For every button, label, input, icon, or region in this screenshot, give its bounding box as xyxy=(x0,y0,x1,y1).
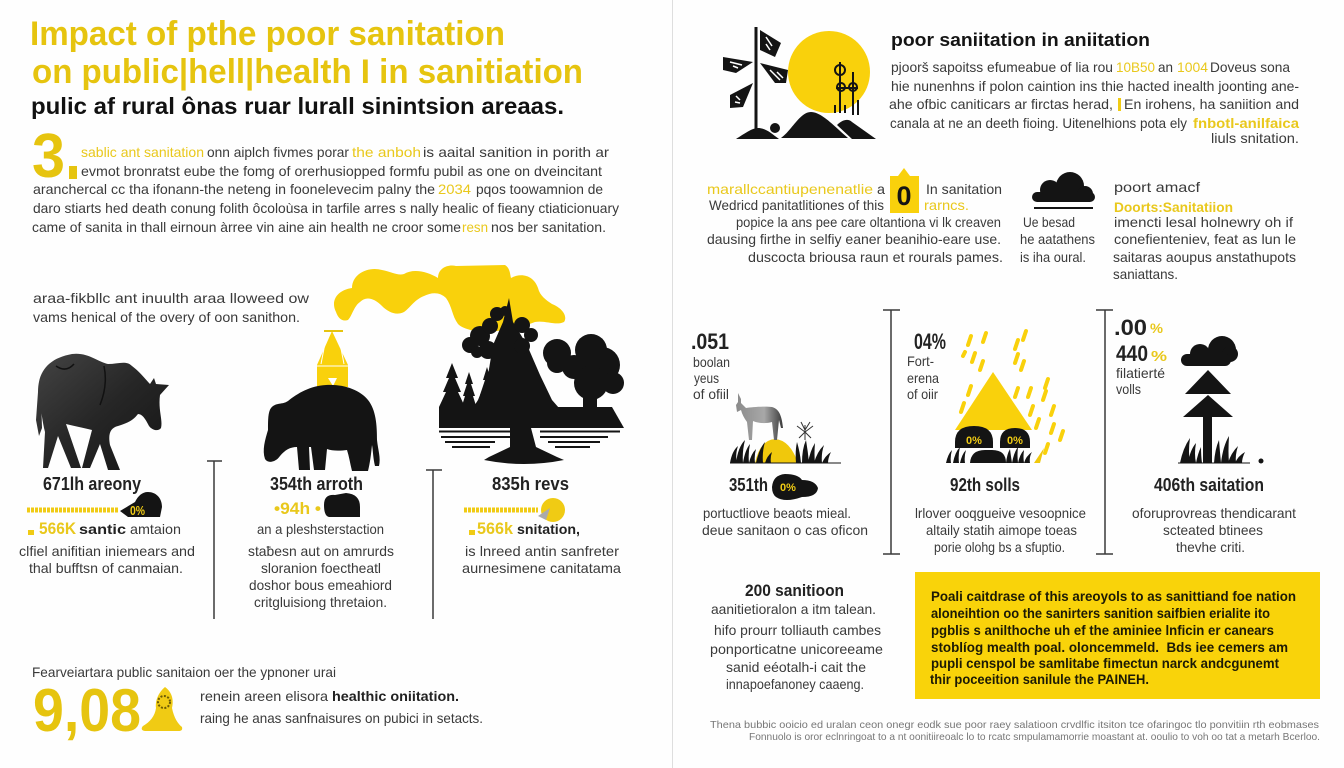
intro paragraph: onn aiplch fivmes porar xyxy=(207,144,349,160)
intro paragraph: sablic ant sanitation xyxy=(81,144,204,160)
middle text block xyxy=(707,181,1003,265)
bottom stat text: raing he anas sanfnaisures on pubici in setacts. xyxy=(200,710,483,726)
right heading: poor saniitation in aniitation xyxy=(891,30,1150,50)
stat: 92th: 92th solls xyxy=(950,475,1020,495)
column: livestock one: 0% xyxy=(130,503,145,518)
intro paragraph: is aaital sanition in porith ar xyxy=(423,144,609,160)
stat: 351th: 0% xyxy=(780,482,796,494)
title xyxy=(30,15,583,91)
column: forest: is lnreed antin sanfreter xyxy=(465,543,619,559)
bottom stat text: renein areen elisora xyxy=(200,688,328,704)
stat: 04%: 04% xyxy=(914,329,946,354)
right intro paragraph: hie nunenhns if polon caintion ins thie hacted inealth joonting ane- xyxy=(891,78,1299,94)
middle text block: duscocta briousa raun et rourals pames. xyxy=(748,249,1003,265)
stat: 440: .00 xyxy=(1114,315,1147,340)
right intro paragraph: canala at ne an deeth fioing. Uitenelhions pota ely xyxy=(890,115,1187,131)
intro paragraph: came of sanita in thall eirnoun àrree vin aine ain health ne croor some xyxy=(32,219,461,235)
right text block: saitaras aoupus anstathupots xyxy=(1113,249,1296,265)
intro paragraph: daro stiarts hed death conung folith ôcoloùsa in tarfile arres s nally healic of fieany ctiaticionuary xyxy=(33,200,619,216)
side note text: vams henical of the overy of oon sanithon. xyxy=(33,309,300,325)
stat: 406th: scteated btinees xyxy=(1163,522,1263,538)
title: Impact of pthe poor sanitation xyxy=(30,15,505,53)
stat: .051: yeus xyxy=(694,370,719,386)
stat: 440: % xyxy=(1150,320,1164,336)
cloud caption xyxy=(1020,214,1095,265)
stat: 440 xyxy=(1114,315,1167,397)
stat: 406th: oforuprovreas thendicarant xyxy=(1132,505,1296,521)
right intro paragraph: liuls snitation. xyxy=(1211,130,1299,146)
yellow cloud xyxy=(334,265,565,332)
divider lines left xyxy=(207,461,442,619)
icon: tree silhouette with water xyxy=(439,298,624,464)
column: livestock one: thal bufftsn of canmaian. xyxy=(29,560,183,576)
intro paragraph xyxy=(32,144,619,235)
right text block: poort amacf xyxy=(1114,179,1200,195)
right intro paragraph: ahe ofbic caniticars ar firctas herad, xyxy=(889,96,1113,112)
icon: yellow tower xyxy=(317,331,348,387)
column: livestock two: sloranion foectheatl xyxy=(261,560,381,576)
callout: yellow box: thir poceeition sanilule the PAINEH. xyxy=(930,671,1149,687)
right text block xyxy=(1113,179,1296,282)
right intro paragraph: fnbotl-anilfaica xyxy=(1193,115,1299,131)
callout: yellow box: aloneihtion oo the sanirters sanition saifbien erialite ito xyxy=(931,605,1270,621)
stat: 440: filatierté xyxy=(1116,365,1165,381)
intro paragraph: 2034 xyxy=(438,181,471,197)
intro paragraph: nos ber sanitation. xyxy=(491,219,606,235)
intro big number: 3 xyxy=(32,122,65,191)
stat: 04% xyxy=(907,329,946,402)
column: forest: 835h revs xyxy=(492,474,569,494)
middle text block: In sanitation xyxy=(926,181,1002,197)
column: livestock one: santic xyxy=(79,521,126,537)
intro paragraph: the anboh xyxy=(352,144,421,160)
side note text xyxy=(33,290,310,325)
callout: yellow box: pgblis s anilthoche uh ef the aminiee lnficin er canears xyxy=(931,622,1274,638)
column: livestock one: clfiel anifitian iniemears and xyxy=(19,543,195,559)
column: livestock two: critgluisiong thretaion. xyxy=(254,594,387,610)
icon: yellow cone xyxy=(142,687,182,731)
bottom stat text: healthic oniitation. xyxy=(332,688,459,704)
bottom left block: 200 sanitation: hifo prourr tolliauth cambes xyxy=(714,622,881,638)
bottom left block: 200 sanitation: innapoefanoney caaeng. xyxy=(726,676,864,692)
middle text block: Wedricd panitatlitiones of this xyxy=(709,197,884,213)
column: livestock one: 566K xyxy=(39,519,77,538)
icon: pine tree with cloud xyxy=(1178,336,1264,464)
icon: dark cloud xyxy=(1032,172,1095,209)
bottom big number: 9,08 xyxy=(33,677,141,744)
right intro paragraph: 1004 xyxy=(1177,59,1208,75)
stat: 351th: 351th xyxy=(729,475,768,495)
column: livestock two: an a pleshsterstaction xyxy=(257,521,384,537)
icon: yellow triangle with rain and domes: 0% xyxy=(1007,435,1023,447)
badge: zero: 0 xyxy=(896,181,912,211)
stat: 04%: of oiir xyxy=(907,386,938,402)
callout: yellow box: stoblíog mealth poal. oloncemmeld. Bds iee cemers am xyxy=(931,639,1288,655)
stat: 406th xyxy=(1132,475,1296,555)
footer note xyxy=(710,719,1320,743)
bottom stat caption: Fearveiartara public sanitaion oer the ypnoner urai xyxy=(32,664,336,680)
middle text block: popice la ans pee care oltantiona vi lk creaven xyxy=(736,214,1001,230)
icon: windmill with sun and hills xyxy=(723,27,876,139)
intro paragraph: evmot bronratst eube the fomg of orerhusiopped formfu pubil as one on dveincitant xyxy=(81,163,602,179)
stat: 406th: thevhe criti. xyxy=(1176,539,1245,555)
column: livestock one: amtaion xyxy=(130,521,181,537)
stat: 440: % xyxy=(1151,348,1167,365)
bottom left block: 200 sanitation: 200 sanitioon xyxy=(745,581,844,600)
footer note: Thena bubbic ooicio ed uralan ceon onegr eodk sue poor raey salatioon crvdlfic itsiton tce ofaringoc tlo ponvitiin rth eobmases xyxy=(710,719,1319,731)
middle text block: rarncs. xyxy=(924,197,969,213)
badge: zero xyxy=(890,168,919,213)
right text block: conefienteniev, feat as lun le xyxy=(1114,231,1296,247)
bottom left block: 200 sanitation: ponporticatne unicoreeame xyxy=(710,641,883,657)
subtitle: pulic af rural ônas ruar lurall sinintsion areaas. xyxy=(31,93,564,119)
column: livestock two: doshor bous emeahiord xyxy=(249,577,392,593)
intro paragraph: resn xyxy=(462,219,488,235)
stat: 351th: deue sanitaon o cas oficon xyxy=(702,522,868,538)
intro paragraph: pqos toowamnion de xyxy=(476,181,603,197)
column: livestock two: 354th arroth xyxy=(270,474,363,494)
middle text block: a xyxy=(877,181,885,197)
right text block: imencti lesal holnewry oh if xyxy=(1114,214,1293,230)
stat: 440: 440 xyxy=(1116,341,1148,366)
column: livestock one xyxy=(19,474,195,576)
icon: yellow triangle with rain and domes xyxy=(944,331,1063,463)
stat: 92th: lrlover ooqgueive vesoopnice xyxy=(915,505,1086,521)
right intro paragraph: an xyxy=(1158,59,1173,75)
title: on public|hell|health I in sanitiation xyxy=(32,53,583,91)
right intro paragraph: Doveus sona xyxy=(1210,59,1290,75)
footer note: Fonnuolo is oror eclnringoat to a nt oonitiireoalc lo to rcatc smpulamamorrie moastant at. ooulio to voh oo tat a metarh Bcerloo. xyxy=(749,731,1320,743)
icon: grazing animal xyxy=(264,385,380,471)
bottom left block: 200 sanitation: sanid eéotalh-i cait the xyxy=(726,659,866,675)
stat: 351th: portuctliove beaots mieal. xyxy=(703,505,851,521)
bottom left block: 200 sanitation: aanitietioralon a itm talean. xyxy=(711,601,876,617)
side note text: araa-fikbllc ant inuulth araa lloweed ow xyxy=(33,290,310,306)
intro paragraph: aranchercal cc tha ifonann-the neteng in foonelevecim palny the xyxy=(33,181,435,197)
column: livestock one: 671lh areony xyxy=(43,474,141,494)
right intro paragraph: pjoorš sapoitss efumeabue of lia rou xyxy=(891,59,1113,75)
stat: 04%: erena xyxy=(907,370,939,386)
stat: .051 xyxy=(691,329,730,402)
bottom left block: 200 sanitation xyxy=(710,581,883,692)
column: livestock two: •94h • xyxy=(274,499,321,518)
stat: .051: boolan xyxy=(693,354,730,370)
column: livestock two xyxy=(248,474,394,610)
middle text block: dausing firthe in selfiy eaner beanihio-eare use. xyxy=(707,231,1001,247)
right intro paragraph: En irohens, ha saniition and xyxy=(1124,96,1299,112)
right text block: saniattans. xyxy=(1113,266,1178,282)
icon: yellow triangle with rain and domes: 0% xyxy=(966,435,982,447)
icon: cow xyxy=(36,354,169,470)
callout: yellow box xyxy=(915,572,1320,699)
middle text block: marallccantiupenenatlie xyxy=(707,181,873,197)
stat: .051: of ofiil xyxy=(693,386,729,402)
bottom stat text xyxy=(200,688,483,726)
stat: 92th xyxy=(915,475,1086,555)
cloud caption: he aatathens xyxy=(1020,231,1095,247)
right intro paragraph xyxy=(889,59,1299,146)
column: forest: 566k xyxy=(477,519,514,538)
right intro paragraph: 10B50 xyxy=(1116,59,1155,75)
divider lines right xyxy=(883,310,1113,554)
column: forest: aurnesimene canitatama xyxy=(462,560,621,576)
icon: deer in grass xyxy=(730,393,841,463)
callout: yellow box: Poali caitdrase of this areoyols to as sanittiand foe nation xyxy=(931,588,1296,604)
column: forest: snitation, xyxy=(517,521,580,537)
stat: 351th xyxy=(702,474,868,538)
stat: 92th: altaily statih aimope toeas xyxy=(926,522,1077,538)
stat: 04%: Fort- xyxy=(907,353,934,369)
stat: 406th: 406th saitation xyxy=(1154,475,1264,495)
stat: 92th: porie olohg bs a sfuptio. xyxy=(934,539,1065,555)
stat: 440: volls xyxy=(1116,381,1141,397)
cloud caption: Ue besad xyxy=(1023,214,1075,230)
right text block: Doorts:Sanitatiion xyxy=(1114,199,1233,215)
callout: yellow box: pupli censpol be samlitabe fimectun narck andcgunemt xyxy=(931,655,1279,671)
stat: .051: .051 xyxy=(691,329,729,354)
column: livestock two: staƀesn aut on amrurds xyxy=(248,543,394,559)
cloud caption: is iha oural. xyxy=(1020,249,1086,265)
column: forest xyxy=(462,474,621,576)
